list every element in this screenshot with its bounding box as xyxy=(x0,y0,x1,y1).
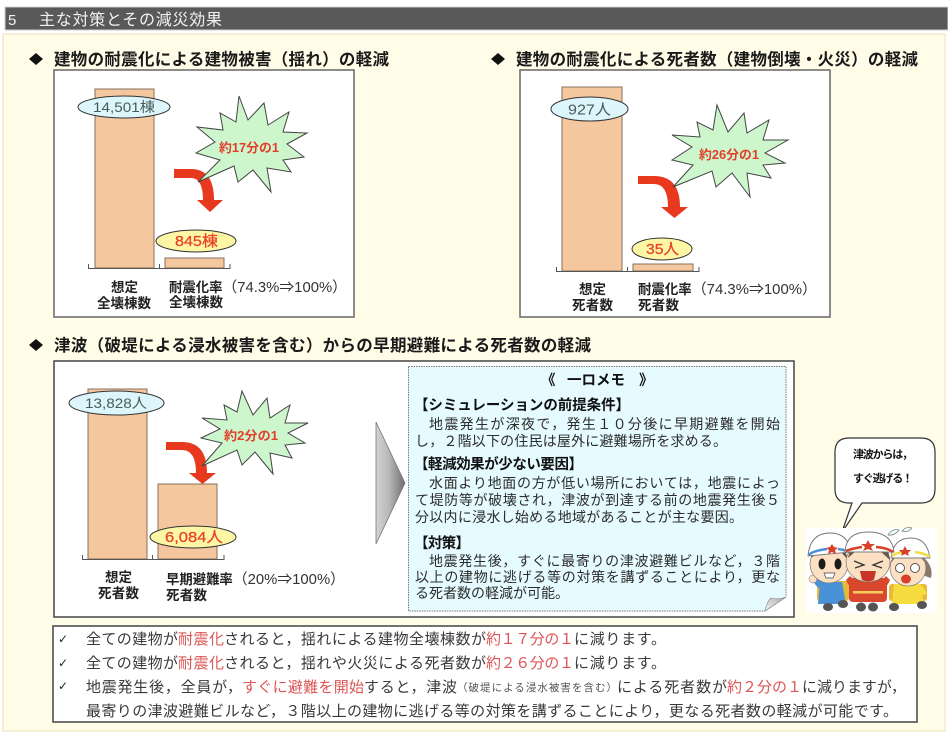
speech bubble: 津波からは， xyxy=(853,447,913,461)
value: 14,501 buildings xyxy=(78,96,170,118)
summary line 2: 耐震化 xyxy=(178,655,224,672)
worker: blue xyxy=(808,533,851,611)
panel: tsunami chart and memo xyxy=(54,361,794,617)
summary line 1: されると，揺れによる建物全壊棟数が xyxy=(224,631,486,648)
summary line 3: 約２分の１ xyxy=(727,679,802,696)
summary line 3: すぐに避難を開始 xyxy=(242,679,364,696)
memo note xyxy=(408,366,786,611)
starburst: about 1/26 xyxy=(672,105,788,197)
value: 14,501 buildings: 14,501棟 xyxy=(93,99,155,115)
bar: deaths with early evacuation xyxy=(158,484,217,559)
axis label: assumed deaths: 死者数 xyxy=(98,585,140,601)
axis label: retrofit: 全壊棟数 xyxy=(169,294,224,310)
axis label: retrofit: 耐震化率（74.3%⇒100%） xyxy=(169,279,347,296)
summary line 2: 全ての建物が xyxy=(86,655,178,672)
memo section: countermeasures: 地震発生後，すぐに最寄りの津波避難ビルなど，３階 xyxy=(429,553,780,569)
value: 845 buildings xyxy=(156,230,236,252)
memo note: 一ロメモ xyxy=(567,373,625,389)
memo section: countermeasures xyxy=(414,534,780,601)
summary box xyxy=(53,626,917,722)
starburst: about 1/26: 約26分の1 xyxy=(699,147,759,162)
summary line 1: 全ての建物が xyxy=(86,631,178,648)
axis label: retrofit deaths: 耐震化率（74.3%⇒100%） xyxy=(638,281,817,298)
memo section: countermeasures: 以上の建物に逃げる等の対策を講ずることにより，更な xyxy=(415,569,780,585)
worker: yellow xyxy=(889,538,932,611)
summary line 2: 約２６分の１ xyxy=(486,655,574,672)
summary line 1: 約１７分の１ xyxy=(486,631,574,648)
memo section: limiting factors: 分以内に浸水し始める地域があることが主な要因。 xyxy=(415,509,743,525)
axis label: assumed deaths: 想定 xyxy=(105,569,132,585)
arrow: reduction xyxy=(638,176,688,218)
summary line 3 xyxy=(58,679,906,696)
summary line 3: による死者数が xyxy=(617,679,727,696)
axis label: assumed deaths: 死者数 xyxy=(572,297,614,313)
value: 35 people xyxy=(632,238,692,260)
sweat drops xyxy=(888,527,912,535)
summary line 2: されると，揺れや火災による死者数が xyxy=(224,655,486,672)
heading: building damage: 建物の耐震化による建物被害（揺れ）の軽減 xyxy=(54,50,390,69)
memo note: 》 xyxy=(639,372,654,389)
value: 13,828 people: 13,828人 xyxy=(85,395,147,411)
axis label: assumed: 想定 xyxy=(111,279,138,295)
summary line 1: ✓ xyxy=(58,632,68,646)
summary line 1: に減ります。 xyxy=(574,631,666,648)
summary line 4: 最寄りの津波避難ビルなど，３階以上の建物に逃げる等の対策を講ずることにより，更なる死者数の軽減が可能です。 xyxy=(86,702,898,720)
starburst: about 1/2: 約2分の1 xyxy=(224,428,278,443)
summary line 1 xyxy=(58,631,666,648)
summary line 1: 耐震化 xyxy=(178,631,224,648)
bar: deaths after retrofit xyxy=(633,264,693,271)
memo title: 《 xyxy=(541,372,556,389)
axis label: early evacuation: 早期避難率（20%⇒100%） xyxy=(166,571,345,588)
heading: tsunami evacuation: 津波（破堤による浸水被害を含む）からの早期避難による死者数の軽減 xyxy=(54,336,592,355)
starburst: about 1/17: 約17分の1 xyxy=(219,140,279,155)
bar: collapsed buildings after retrofit xyxy=(165,258,224,268)
memo section: limiting factors: 水面より地面の方が低い場所においては，地震によっ xyxy=(429,475,780,491)
axis label: early evacuation: 死者数 xyxy=(166,587,208,603)
memo section: simulation conditions: し，２階以下の住民は屋外に避難場所を求める。 xyxy=(415,433,727,449)
starburst: about 1/17 xyxy=(196,96,307,192)
axis label: early evacuation xyxy=(166,571,345,603)
worker: red xyxy=(845,532,894,612)
title bar: 5 xyxy=(8,12,16,29)
summary line 3: すると，津波 xyxy=(364,679,457,696)
memo section: countermeasures: る死者数の軽減が可能。 xyxy=(415,585,569,601)
value: 13,828 people xyxy=(69,391,164,415)
title bar xyxy=(5,7,948,30)
speech bubble xyxy=(835,438,935,532)
summary line 3: に減りますが， xyxy=(802,679,906,696)
axis label: assumed deaths: 想定 xyxy=(579,281,606,297)
summary line 2: に減ります。 xyxy=(574,655,666,672)
value: 35 people: 35人 xyxy=(646,241,679,258)
summary line 2: ✓ xyxy=(58,656,68,670)
axis label: assumed deaths xyxy=(572,281,614,313)
memo section: limiting factors xyxy=(414,455,780,525)
axis label: assumed: 全壊棟数 xyxy=(97,295,152,311)
axis label: assumed xyxy=(97,279,152,311)
arrow: reduction xyxy=(166,442,216,484)
speech bubble: すぐ逃げる！ xyxy=(853,471,913,485)
heading: deaths from collapse and fire: 建物の耐震化による死者数（建物倒壊・火災）の軽減 xyxy=(516,50,918,69)
memo section: simulation conditions xyxy=(414,396,780,449)
axis label: retrofit xyxy=(169,279,347,310)
summary line 3: ✓ xyxy=(58,679,68,693)
bar: assumed deaths xyxy=(562,87,622,271)
axis label: assumed deaths xyxy=(98,569,140,601)
value: 6,084 people xyxy=(150,526,236,548)
summary line 3: 地震発生後，全員が， xyxy=(86,679,242,696)
value: 927 people xyxy=(551,97,628,121)
value: 927 people: 927人 xyxy=(568,102,611,118)
axis label: retrofit deaths: 死者数 xyxy=(638,297,680,313)
axis label: retrofit deaths xyxy=(638,281,817,313)
starburst: about 1/2 xyxy=(201,391,308,474)
title bar: 主な対策とその減災効果 xyxy=(39,11,222,29)
panel: deaths chart xyxy=(520,70,830,317)
memo section: simulation conditions: 【シミュレーションの前提条件】 xyxy=(414,396,630,414)
illustration: three rescue workers xyxy=(806,527,937,613)
value: 6,084 people: 6,084人 xyxy=(165,529,223,546)
memo section: simulation conditions: 地震発生が深夜で，発生１０分後に早期避難を開始 xyxy=(429,416,780,432)
value: 845 buildings: 845棟 xyxy=(175,233,218,250)
summary line 2 xyxy=(58,655,666,672)
bar: assumed tsunami deaths xyxy=(88,389,147,559)
memo section: limiting factors: 【軽減効果が少ない要因】 xyxy=(414,455,583,473)
bar: assumed collapsed buildings xyxy=(95,89,154,268)
memo section: countermeasures: 【対策】 xyxy=(414,534,470,552)
arrow: grey triangle xyxy=(376,422,405,544)
arrow: reduction xyxy=(174,169,223,212)
summary line 3: （破堤による浸水被害を含む） xyxy=(457,681,617,694)
panel: building damage chart xyxy=(54,70,354,317)
memo section: limiting factors: て堤防等が破壊され，津波が到達する前の地震発生後５ xyxy=(415,492,780,508)
